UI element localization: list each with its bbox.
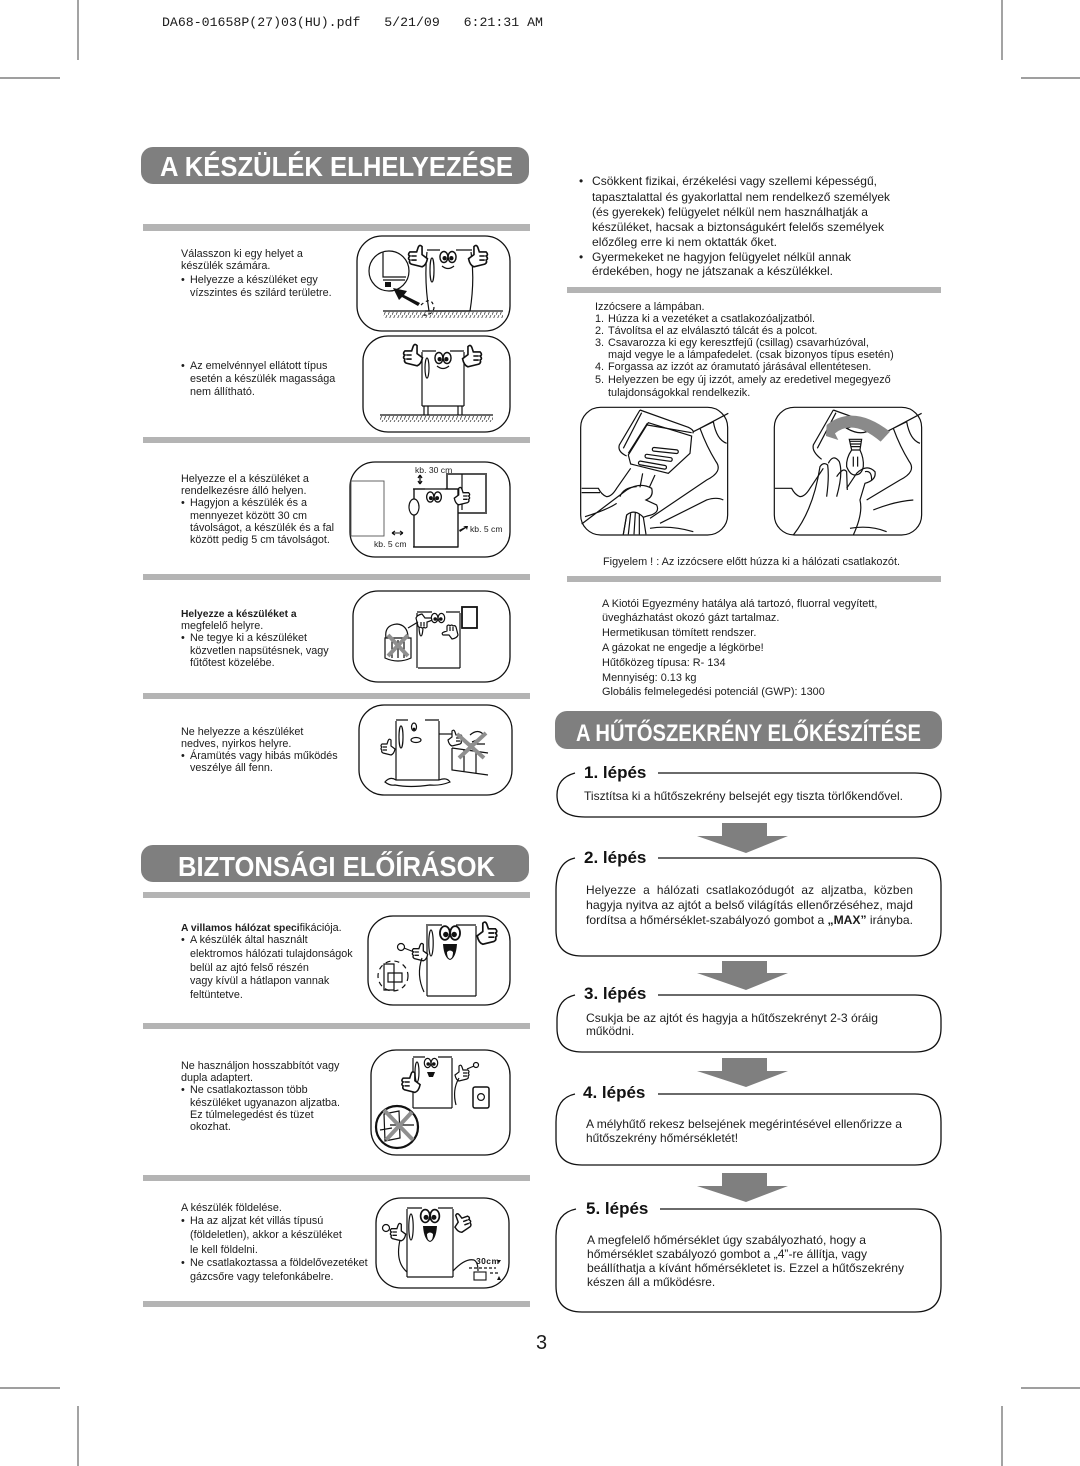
text block: bulb replacement: Csavarozza ki egy keresztfejű (csillag) csavarhúzóval, [608, 337, 869, 349]
illustration: clearance distances [350, 462, 510, 557]
text block: earthing: (földeletlen), akkor a készüléket [190, 1229, 342, 1241]
text block: clearance: távolságot, a készülék és a fal [190, 522, 334, 534]
text block: electrical specification: vagy kívül a hátlapon vannak [190, 975, 330, 987]
text block: clearance: között pedig 5 cm távolságot. [190, 534, 330, 546]
text block: electrical specification: belül az ajtó felső részén [190, 962, 309, 974]
text block: humid places [181, 726, 338, 774]
text block: bulb replacement: 4. [595, 361, 604, 373]
text block: bulb replacement: tulajdonságokkal rendelkezik. [608, 387, 750, 399]
step 5: beállíthatja a kívánt hőmérsékletet is. Ezzel a hűtőszekrény [587, 1261, 904, 1275]
text block: humid places: Áramütés vagy hibás működés [190, 749, 338, 762]
illustration: levelling the fridge [357, 236, 510, 331]
text block: suitable place: fűtőtest közelébe. [190, 657, 275, 669]
arrow: step 2 to 3 [697, 961, 788, 990]
text block: bulb replacement: Helyezzen be egy új izzót, amely az eredetivel megegyező [608, 374, 891, 386]
step 1: 1. lépés [584, 763, 646, 782]
illustration: no double adapter [371, 1050, 510, 1155]
text block: humid places: • [181, 750, 185, 762]
text block: earthing: Ha az aljzat két villás típusú [190, 1215, 323, 1227]
heading: Biztonsági előírások: BIZTONSÁGI ELŐÍRÁSOK [178, 851, 495, 882]
illustration: wet surroundings [359, 705, 512, 795]
text block: electrical specification: feltüntetve. [190, 989, 243, 1001]
illustration: plug and socket [368, 916, 510, 1005]
text block: earthing: • [181, 1257, 185, 1269]
text block: supervision warnings: (és gyerekek) felügyelet nélkül nem használhatják a [592, 205, 868, 219]
step 1: Tisztítsa ki a hűtőszekrény belsejét egy tiszta törlőkendővel. [584, 789, 903, 803]
text block: supervision warnings: • [579, 174, 583, 188]
text block: refrigerant information: A gázokat ne engedje a légkörbe! [602, 642, 764, 654]
text block: supervision warnings: • [579, 250, 583, 264]
text block: bulb replacement: 1. [595, 313, 604, 325]
text block: supervision warnings: előzőleg erre ki nem oktatták őket. [592, 235, 777, 249]
text block: extension leads: dupla adaptert. [181, 1072, 253, 1084]
text block: humid places: Ne helyezze a készüléket [181, 726, 303, 738]
arrow: step 4 to 5 [697, 1173, 788, 1202]
illustration: clearance distances: kb. 5 cm [470, 524, 502, 534]
heading: A készülék elhelyezése: A KÉSZÜLÉK ELHELYEZÉSE [160, 151, 513, 182]
text block: choosing a place: Helyezze a készüléket egy [190, 274, 318, 286]
text block: earthing [181, 1202, 368, 1283]
text block: suitable place: Helyezze a készüléket a [181, 609, 297, 620]
illustration: fridge on stand [363, 336, 510, 432]
text block: bulb replacement [595, 301, 894, 399]
text block: bulb replacement: Távolítsa el az elválasztó tálcát és a polcot. [608, 325, 817, 337]
text block: choosing a place [181, 248, 332, 299]
step 5: 5. lépés [586, 1199, 648, 1218]
text block: extension leads [181, 1060, 340, 1133]
step 2: hagyja nyitva az ajtót a belső világítás ellenőrzéséhez, majd [586, 898, 913, 912]
step 3: működni. [586, 1024, 634, 1038]
text block: extension leads: • [181, 1084, 185, 1096]
text block: extension leads: készüléket ugyanazon aljzatba. [190, 1097, 340, 1109]
text block: choosing a place: • [181, 274, 185, 286]
text block: supervision warnings [579, 174, 890, 278]
illustration: replacing bulb [774, 407, 922, 535]
text block: electrical specification: • [181, 934, 185, 946]
text block: bulb replacement: 3. [595, 337, 604, 349]
step 1 [557, 763, 941, 817]
step 3 [557, 984, 941, 1052]
step 2: 2. lépés [584, 848, 646, 867]
step 5: A megfelelő hőmérséklet úgy szabályozható, hogy a [587, 1233, 866, 1247]
text block: suitable place [181, 609, 329, 669]
text block: extension leads: Ne használjon hosszabbítót vagy [181, 1060, 340, 1072]
text block: bulb replacement: 2. [595, 325, 604, 337]
text block: suitable place: Ne tegye ki a készüléket [190, 632, 307, 644]
text block: bulb replacement: Izzócsere a lámpában. [595, 301, 705, 313]
text block: extension leads: Ez túlmelegedést és tüzet [190, 1109, 314, 1121]
text block: supervision warnings: tapasztalattal és gyakorlattal nem rendelkező személyek [592, 190, 890, 204]
text block: choosing a place: vízszintes és szilárd területre. [190, 287, 332, 299]
text block: refrigerant information: Hermetikusan tömített rendszer. [602, 627, 756, 639]
text block: extension leads: Ne csatlakoztasson több [190, 1084, 308, 1096]
step 2: fordítsa a hőmérséklet-szabályozó gombot a „MAX” irányba. [586, 913, 913, 927]
text block: clearance: rendelkezésre álló helyen. [181, 485, 306, 497]
step 4 [556, 1083, 941, 1165]
text block: earthing: Ne csatlakoztassa a földelővezetéket [190, 1257, 368, 1269]
step 3: 3. lépés [584, 984, 646, 1003]
step 5: hőmérséklet szabályozó gombot a „4”-re állítja, vagy [587, 1247, 867, 1261]
text block: electrical specification: elektromos hálózati tulajdonságok [190, 948, 353, 960]
illustration: clearance distances: kb. 30 cm [415, 465, 452, 475]
text block: supervision warnings: Gyermekeket ne hagyjon felügyelet nélkül annak [592, 250, 851, 264]
illustration: clearance distances: kb. 5 cm [374, 539, 406, 549]
text block: refrigerant information: Hűtőközeg típusa: R- 134 [602, 657, 726, 669]
text block: adjustable height: • [181, 360, 185, 372]
text block: earthing: • [181, 1215, 185, 1227]
text block: clearance [181, 473, 334, 546]
heading: A hűtőszekrény előkészítése [555, 711, 942, 749]
text block: electrical specification [181, 922, 353, 1001]
text block: refrigerant information: üvegházhatást okozó gázt tartalmaz. [602, 612, 779, 624]
text block: suitable place: • [181, 632, 185, 644]
text block: supervision warnings: érdekében, hogy ne játszanak a készülékkel. [592, 264, 833, 278]
warning text: Figyelem ! : Az izzócsere előtt húzza ki a hálózati csatlakozót. [603, 556, 900, 568]
text block: suitable place: megfelelő helyre. [181, 620, 263, 632]
text block: bulb replacement: 5. [595, 374, 604, 386]
text block: suitable place: közvetlen napsütésnek, vagy [190, 645, 329, 657]
text block: clearance: Helyezze el a készüléket a [181, 473, 309, 485]
step 3: Csukja be az ajtót és hagyja a hűtőszekrényt 2-3 óráig [586, 1011, 878, 1025]
text block: clearance: mennyezet között 30 cm [190, 510, 307, 522]
text block: humid places: nedves, nyirkos helyre. [181, 738, 291, 750]
illustration: unscrewing lamp cover [581, 407, 728, 535]
text block: refrigerant information [602, 598, 877, 698]
text block: supervision warnings: Csökkent fizikai, érzékelési vagy szellemi képességű, [592, 174, 877, 188]
text block: earthing: A készülék földelése. [181, 1202, 282, 1214]
illustration: earthing wire: 30cm [476, 1256, 499, 1266]
heading: A hűtőszekrény előkészítése: A HŰTŐSZEKRÉNY ELŐKÉSZÍTÉSE [576, 719, 921, 747]
text block: refrigerant information: Mennyiség: 0.13 kg [602, 672, 696, 684]
step 4: hűtőszekrény hőmérsékletét! [586, 1131, 738, 1145]
text block: clearance: Hagyjon a készülék és a [190, 497, 307, 509]
arrow: step 1 to 2 [697, 823, 788, 853]
text block: adjustable height [181, 360, 335, 398]
text block: clearance: • [181, 497, 185, 509]
text block: humid places: veszélye áll fenn. [190, 762, 273, 774]
text block: electrical specification: A készülék által használt [190, 934, 308, 946]
text block: bulb replacement: Forgassa az izzót az óramutató járásával ellentétesen. [608, 361, 871, 373]
page number: 3 [536, 1332, 547, 1354]
arrow: step 3 to 4 [697, 1058, 788, 1087]
text block: bulb replacement: Húzza ki a vezetéket a csatlakozóaljzatból. [608, 313, 815, 325]
text block: adjustable height: nem állítható. [190, 386, 255, 398]
step 4: 4. lépés [583, 1083, 645, 1102]
text block: supervision warnings: készüléket, hacsak a biztonságukért felelős személyek [592, 220, 884, 234]
text block: adjustable height: esetén a készülék magassága [190, 373, 335, 385]
text block: bulb replacement: majd vegye le a lámpafedelet. (csak bizonyos típus esetén) [608, 349, 894, 361]
text block: refrigerant information: Globális felmelegedési potenciál (GWP): 1300 [602, 686, 825, 698]
file header line: DA68-01658P(27)03(HU).pdf 5/21/09 6:21:31 AM [162, 15, 543, 30]
text block: choosing a place: készülék számára. [181, 260, 270, 272]
step 4: A mélyhűtő rekesz belsejének megérintésével ellenőrizze a [586, 1117, 902, 1131]
text block: earthing: gázcsőre vagy telefonkábelre. [190, 1271, 333, 1283]
illustration: earthing wire [376, 1198, 509, 1288]
text block: extension leads: okozhat. [190, 1121, 231, 1133]
text block: refrigerant information: A Kiotói Egyezmény hatálya alá tartozó, fluorral vegyített, [602, 598, 877, 610]
step 5 [556, 1199, 941, 1312]
step 2: Helyezze a hálózati csatlakozódugót az aljzatba, közben [586, 883, 913, 897]
step 5: készen áll a működésre. [587, 1275, 715, 1289]
text block: choosing a place: Válasszon ki egy helyet a [181, 248, 303, 260]
illustration: keep away from heat [353, 591, 510, 682]
step 2 [556, 848, 941, 956]
text block: electrical specification: A villamos hálózat specifikációja. [181, 922, 342, 934]
text block: adjustable height: Az emelvénnyel ellátott típus [190, 360, 328, 372]
text block: earthing: le kell földelni. [190, 1244, 258, 1256]
